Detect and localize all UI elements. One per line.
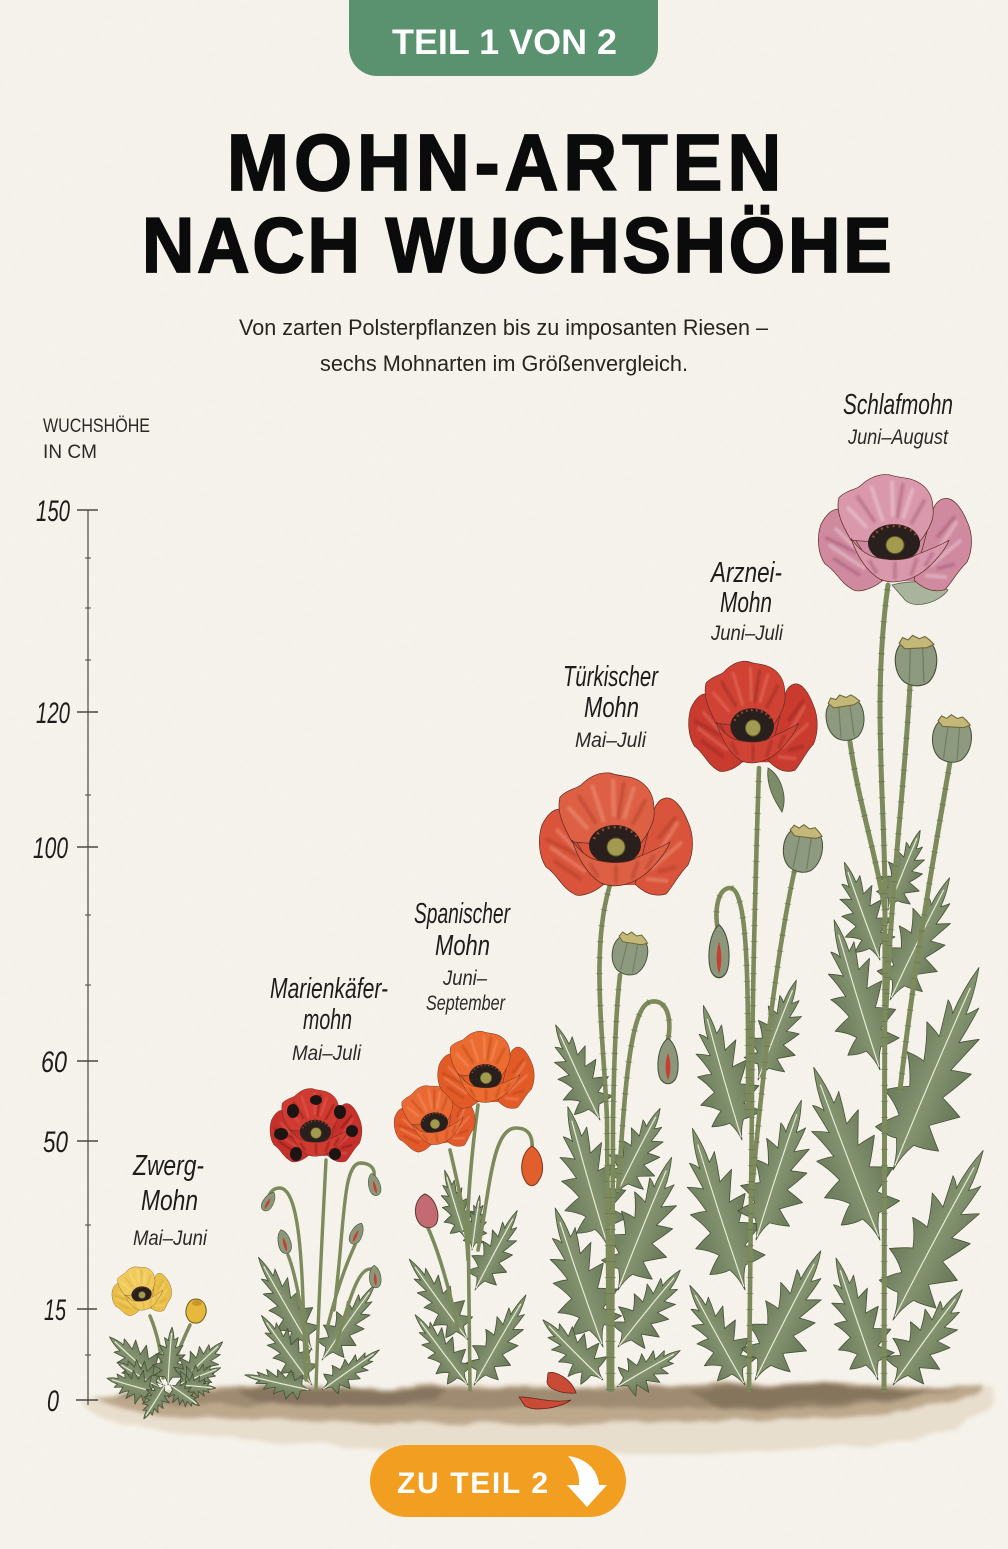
plant: Spanischer Mohn [389, 1031, 545, 1396]
title: NACH WUCHSHÖHE [142, 202, 892, 289]
label: Spanischer Mohn [414, 898, 511, 1015]
sepal under flower [892, 582, 948, 605]
label: Schlafmohn: Juni–August [847, 426, 949, 449]
height ruler: 50 [43, 1126, 68, 1159]
label: Marienkäfermohn [270, 973, 388, 1065]
label: Schlafmohn: Schlafmohn [843, 389, 953, 421]
label: Spanischer Mohn: Spanischer [414, 898, 511, 930]
plant: Zwerg-Mohn [95, 1262, 236, 1426]
plant: Arzneimohn [660, 661, 850, 1398]
label: Zwerg-Mohn: Mai–Juni [133, 1227, 208, 1250]
label: Türkischer Mohn [563, 661, 659, 752]
axis title [43, 416, 150, 463]
plant: Türkischer Mohn [525, 773, 702, 1405]
height ruler: 120 [36, 697, 70, 730]
label: Zwerg-Mohn: Mohn [141, 1185, 198, 1217]
axis title: IN CM [43, 442, 97, 463]
label: Schlafmohn [843, 389, 953, 449]
height ruler: 100 [33, 832, 68, 865]
sepal on stem [768, 768, 784, 812]
label: Spanischer Mohn: September [426, 992, 506, 1015]
height ruler: 60 [41, 1046, 67, 1079]
bud: pink [415, 1194, 438, 1228]
banner: Teil 1 von 2: TEIL 1 VON 2 [392, 23, 617, 62]
height ruler: 150 [36, 495, 70, 528]
label: Spanischer Mohn: Mohn [435, 930, 490, 962]
bud: orange [522, 1146, 543, 1186]
label: Türkischer Mohn: Türkischer [563, 661, 659, 693]
label: Arzneimohn: Arznei- [709, 557, 782, 589]
icon: curved arrow [567, 1456, 607, 1507]
label: Arzneimohn: Juni–Juli [710, 622, 784, 645]
black spots [274, 1095, 358, 1161]
subtitle [239, 315, 769, 376]
label: Marienkäfermohn: mohn [303, 1004, 352, 1036]
plant: Marienkäfermohn [240, 1088, 391, 1404]
soil strip [82, 1384, 995, 1456]
title [142, 119, 892, 289]
bud: yellow [186, 1299, 206, 1323]
label: Arzneimohn [709, 557, 784, 645]
label: Zwerg-Mohn [132, 1150, 208, 1250]
label: Arzneimohn: Mohn [720, 587, 772, 619]
label: Türkischer Mohn: Mohn [584, 692, 639, 724]
button: zu Teil 2: ZU TEIL 2 [397, 1467, 548, 1500]
height ruler: 0 [47, 1385, 59, 1418]
height ruler [33, 495, 98, 1418]
fallen petals [519, 1372, 576, 1409]
banner: Teil 1 von 2 [349, 0, 658, 76]
label: Türkischer Mohn: Mai–Juli [575, 729, 647, 752]
label: Marienkäfermohn: Marienkäfer- [270, 973, 388, 1005]
plant: Schlafmohn [779, 475, 1008, 1402]
title: MOHN-ARTEN [227, 119, 781, 208]
subtitle: Von zarten Polsterpflanzen bis zu imposanten Riesen – [239, 315, 769, 340]
subtitle: sechs Mohnarten im Größenvergleich. [320, 351, 688, 376]
label: Zwerg-Mohn: Zwerg- [132, 1150, 204, 1182]
label: Spanischer Mohn: Juni– [442, 967, 487, 990]
button: zu Teil 2 [370, 1445, 626, 1517]
label: Marienkäfermohn: Mai–Juli [292, 1042, 362, 1065]
height ruler: 15 [44, 1294, 66, 1327]
axis title: WUCHSHÖHE [43, 416, 150, 437]
